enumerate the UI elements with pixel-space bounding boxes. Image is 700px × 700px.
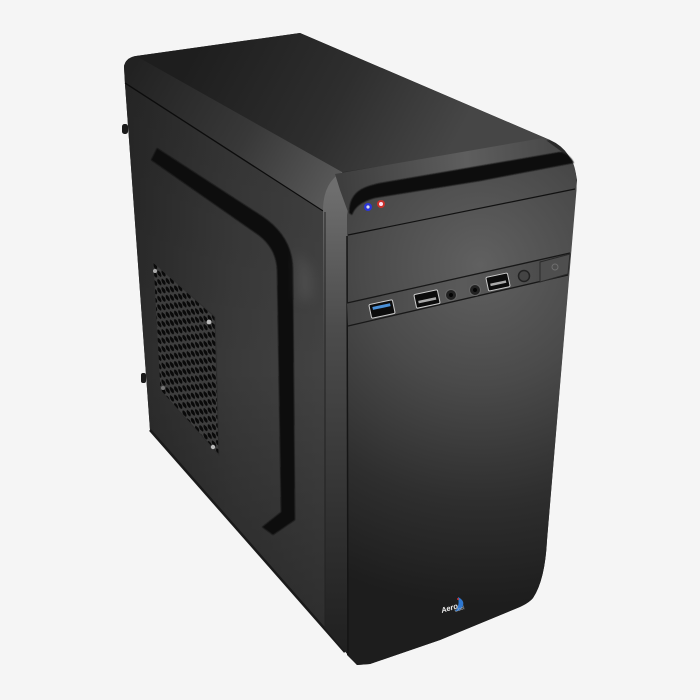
side panel (125, 84, 348, 655)
top face (124, 33, 550, 174)
ventilation grille (153, 262, 219, 455)
brand logo: Aero (439, 601, 459, 615)
microphone jack (470, 284, 480, 296)
side recess: black band (151, 148, 295, 535)
blue LED (364, 203, 372, 211)
case silhouette backing (124, 33, 577, 665)
USB port (486, 273, 510, 291)
top lip (335, 138, 562, 212)
top seam line (348, 189, 575, 235)
brand logo (439, 597, 466, 615)
USB port (414, 290, 440, 308)
audio jack (446, 290, 456, 300)
I/O strip (347, 253, 570, 326)
power button (540, 254, 570, 282)
recess highlight (296, 250, 312, 300)
reset button (518, 270, 530, 282)
front panel (335, 138, 577, 665)
rear thumbscrews (122, 124, 146, 383)
brand logo: Cool (454, 605, 466, 614)
corner strip (323, 172, 350, 655)
USB 3.0 port (369, 300, 395, 318)
red LED (377, 200, 385, 208)
top-left ridge (124, 56, 342, 212)
black bezel band (349, 152, 574, 215)
